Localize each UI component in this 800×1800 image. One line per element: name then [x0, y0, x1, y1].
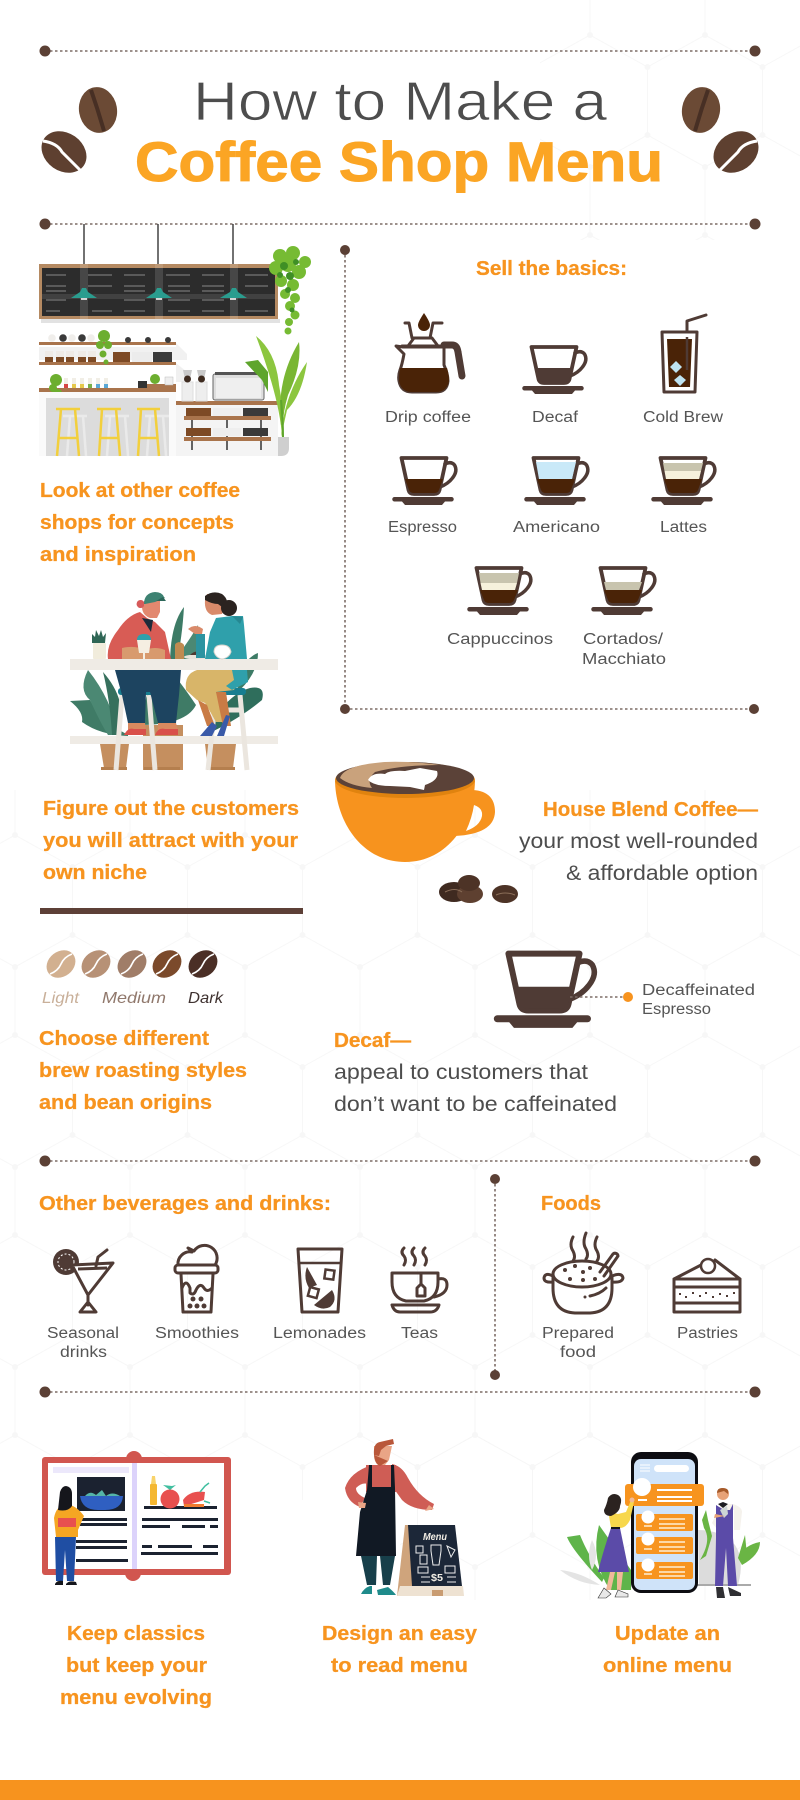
- heading: sell the basics: Sell the basics:: [476, 257, 627, 280]
- text: look at other coffee shops: Look at other coffee: [40, 479, 240, 502]
- label: decaffeinated espresso: [642, 982, 755, 1018]
- icon: smoothie: [175, 1245, 218, 1312]
- label: cortados macchiato: Cortados/: [583, 631, 664, 648]
- illustration: chef with menu sign: Menu: [423, 1532, 447, 1543]
- text: update online menu: online menu: [603, 1654, 732, 1677]
- panel: other beverages and drinks: [39, 1192, 447, 1361]
- labels: roast levels: Dark: [188, 990, 224, 1007]
- label: seasonal drinks: Seasonal: [47, 1325, 119, 1342]
- panel: sell the basics: [340, 245, 759, 714]
- label: prepared food: [542, 1325, 614, 1361]
- text: look at other coffee shops: and inspiration: [40, 543, 196, 566]
- label: cortados macchiato: [582, 631, 666, 668]
- title: How to Make a: [193, 70, 607, 132]
- text: figure out the customers: you will attract with your: [43, 829, 298, 852]
- icon: lemonade: [298, 1249, 342, 1312]
- label: teas: Teas: [401, 1325, 438, 1342]
- text: decaf: don’t want to be caffeinated: [334, 1093, 617, 1116]
- icon: decaffeinated espresso cup: [494, 954, 633, 1028]
- labels: roast levels: Light: [42, 990, 80, 1007]
- label: lattes: Lattes: [660, 519, 707, 536]
- text: keep classics: menu evolving: [60, 1686, 212, 1709]
- icon: cold brew: [662, 315, 706, 392]
- text: figure out the customers: [43, 797, 299, 884]
- text: figure out the customers: Figure out the customers: [43, 797, 299, 820]
- text: look at other coffee shops: [40, 479, 240, 566]
- label: decaffeinated espresso: Decaffeinated: [642, 982, 755, 999]
- label: americano: Americano: [513, 519, 600, 536]
- icon: drip coffee: [396, 313, 462, 392]
- label: cold brew: Cold Brew: [643, 409, 724, 426]
- text: choose different brew: [39, 1027, 247, 1114]
- illustration: menu book with woman: [42, 1451, 231, 1585]
- text: keep classics: [60, 1622, 212, 1709]
- title: [135, 70, 663, 193]
- text: house blend coffee: House Blend Coffee—: [543, 798, 758, 821]
- label: seasonal drinks: drinks: [60, 1344, 107, 1361]
- label: drip coffee: Drip coffee: [385, 409, 471, 426]
- icon: decaf cup: [522, 347, 586, 394]
- label: decaffeinated espresso: Espresso: [642, 1001, 711, 1018]
- icon: cappuccino cup: [467, 568, 531, 615]
- labels: roast levels: Medium: [102, 990, 166, 1007]
- label: decaf: Decaf: [532, 409, 579, 426]
- icon: lattes cup: [651, 458, 715, 505]
- text: choose different brew: Choose different: [39, 1027, 209, 1050]
- text: decaf: appeal to customers that: [334, 1061, 588, 1084]
- label: seasonal drinks: [47, 1325, 119, 1361]
- labels: roast levels: [42, 990, 224, 1007]
- label: pastries: Pastries: [677, 1325, 738, 1342]
- label: smoothies: Smoothies: [155, 1325, 239, 1342]
- illustration: chef with menu sign: $5: [431, 1573, 443, 1584]
- text: keep classics: but keep your: [66, 1654, 207, 1677]
- icon: prepared food pot: [544, 1233, 623, 1313]
- divider below beverages: [40, 1386, 760, 1398]
- vertical divider beverages and foods: [490, 1174, 500, 1380]
- text: design an easy menu: [322, 1622, 478, 1677]
- label: prepared food: Prepared: [542, 1325, 614, 1342]
- label: prepared food: food: [560, 1344, 596, 1361]
- icon: espresso cup: [392, 458, 456, 505]
- label: cappuccinos: Cappuccinos: [447, 631, 553, 648]
- icon: americano cup: [524, 458, 588, 505]
- icon: roast beans scale: [41, 945, 223, 983]
- heading: foods: Foods: [541, 1192, 601, 1215]
- text: design an easy menu: Design an easy: [322, 1622, 478, 1645]
- icon: cocktail: [53, 1249, 113, 1312]
- icon: coffee beans right: [678, 84, 767, 181]
- second divider: [40, 218, 760, 230]
- text: figure out the customers: own niche: [43, 861, 147, 884]
- footer bar: [0, 1780, 800, 1800]
- text: house blend coffee: [519, 798, 758, 885]
- icon: pastry cake: [674, 1259, 740, 1312]
- illustration: chef with menu sign: [345, 1439, 464, 1596]
- text: keep classics: Keep classics: [67, 1622, 205, 1645]
- icon: cortado cup: [591, 568, 655, 615]
- illustration: coffee shop interior: [39, 224, 311, 456]
- text: design an easy menu: to read menu: [331, 1654, 468, 1677]
- text: decaf: Decaf—: [334, 1029, 411, 1052]
- text: update online menu: Update an: [615, 1622, 720, 1645]
- heading: other beverages: Other beverages and drinks:: [39, 1192, 331, 1215]
- title: Coffee Shop Menu: [135, 130, 663, 193]
- text: choose different brew: brew roasting styles: [39, 1059, 247, 1082]
- text: update online menu: [603, 1622, 732, 1677]
- panel: foods: [541, 1192, 740, 1361]
- text: look at other coffee shops: shops for concepts: [40, 511, 234, 534]
- illustration: customers at a table: [70, 592, 278, 770]
- illustration: online menu phone: [560, 1452, 760, 1598]
- icon: tea: [392, 1248, 447, 1312]
- label: cortados macchiato: Macchiato: [582, 651, 666, 668]
- bar: brown divider: [40, 908, 303, 914]
- text: decaf: [334, 1029, 617, 1116]
- label: espresso: Espresso: [388, 519, 457, 536]
- icon: coffee beans left: [33, 84, 121, 181]
- divider above beverages: [40, 1156, 760, 1166]
- label: lemonades: Lemonades: [273, 1325, 366, 1342]
- text: house blend coffee: & affordable option: [566, 862, 758, 885]
- text: choose different brew: and bean origins: [39, 1091, 212, 1114]
- top divider: [40, 46, 760, 56]
- text: house blend coffee: your most well-rounded: [519, 830, 758, 853]
- illustration: orange coffee cup with beans: [335, 762, 518, 903]
